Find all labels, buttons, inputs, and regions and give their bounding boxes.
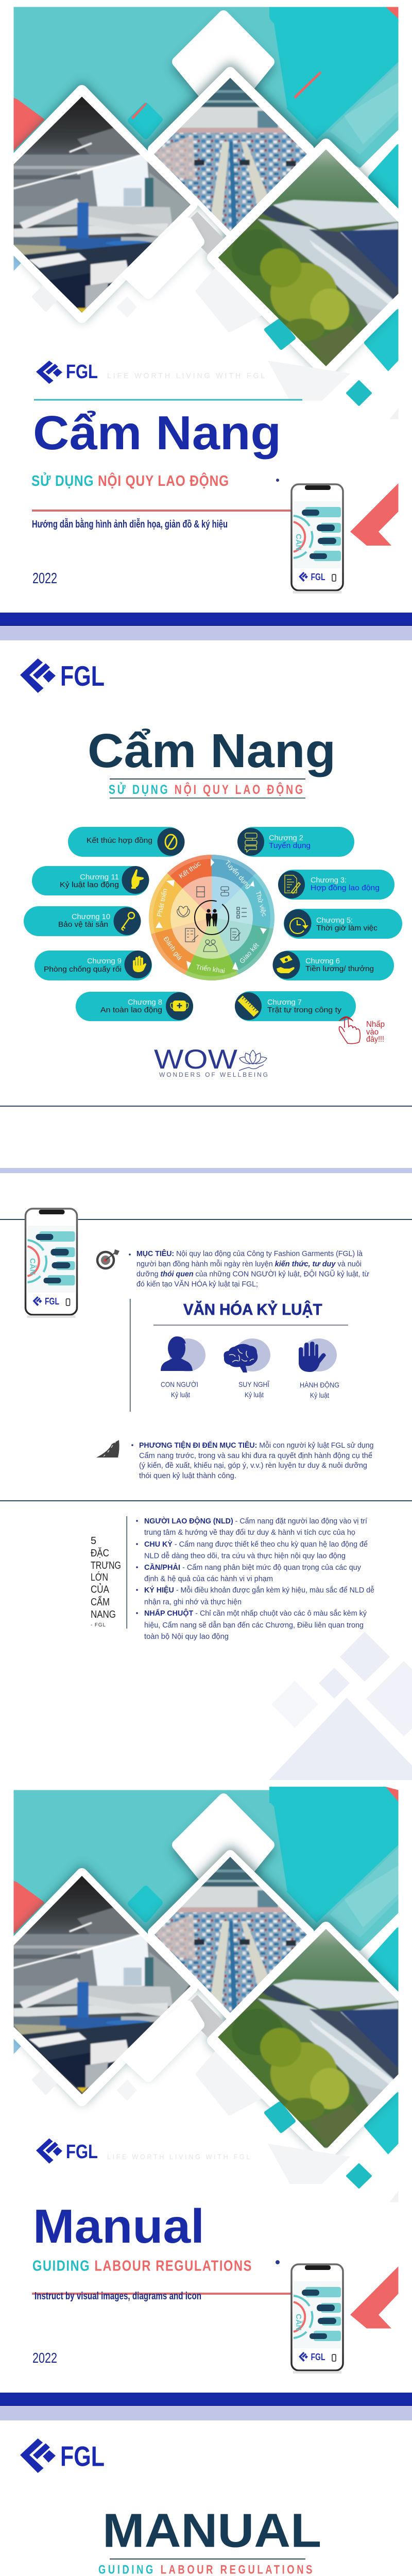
chapter 9 [35,951,152,980]
year: 2022 [32,570,57,587]
cycle wheel: Kết thúc [178,859,202,880]
objective text: MỤC TIÊU: Nội quy lao động của Công ty Fashion Garments (FGL) là [136,1249,363,1258]
section heading: 5 features: TRƯNG [91,1560,121,1571]
logo: FGL: FGL [60,660,105,692]
phone mockup: CẦN [28,1258,37,1275]
means to goal text: thói quen kỷ luật thành công. [139,1472,236,1480]
chapter 9: Chương 9 [87,957,122,965]
arrow chevron [350,483,399,546]
phone mockup [291,484,343,594]
chapter 11 [32,866,149,895]
chapter 3: Chương 3: [311,876,347,885]
year: 2022 [32,2350,57,2366]
feature list: nhận ra, ghi nhớ và thực hiện [144,1598,242,1606]
section heading: 5 features: NANG [91,1609,116,1620]
click hint: vào [366,1028,379,1037]
photo: factory floor [152,76,309,233]
feature list [136,1516,374,1641]
WOW logo [154,1044,268,1078]
icon group: people thoughts actions: HÀNH ĐỘNG [300,1381,339,1389]
section heading: 5 features: 5 [91,1535,96,1547]
objective text: dưỡng thói quen của những CON NGƯỜI kỷ luật, ĐỘI NGŨ kỷ luật, từ [136,1269,369,1279]
chapter 2: Tuyển dụng [269,841,311,850]
icon: road [96,1440,119,1458]
tagline: Instruct by visual images, diagrams and icon [35,2291,201,2302]
icon group: people thoughts actions: Kỷ luật [245,1391,264,1399]
phone mockup: FGL [45,1296,59,1307]
section heading: 5 features: LỚN [91,1571,108,1583]
icon group: people thoughts actions [161,1336,339,1399]
chapter 11: Chương 11 [80,873,119,882]
arrow chevron [350,2266,399,2329]
chapter 8: An toàn lao động [100,1006,162,1014]
chapter 6: Tiền lương/ thưởng [305,964,374,973]
cover panel: Vietnamese photo collage [0,7,412,430]
chapter 3: Hợp đồng lao động [311,884,380,892]
subtitle with rules: SỬ DỤNG NỘI QUY LAO ĐỘNG [109,782,305,797]
icon group: people thoughts actions: Kỷ luật [310,1391,329,1399]
chapter 10: Chương 10 [72,912,110,921]
heading: discipline culture: VĂN HÓA KỶ LUẬT [183,1300,322,1318]
title: Manual: Manual [33,2199,204,2253]
logo: FGL: FGL [60,2440,105,2472]
icon group: people thoughts actions: SUY NGHĨ [238,1380,270,1388]
phone mockup [291,2264,343,2374]
icon: target [97,1249,119,1268]
chapter 2: Chương 2 [269,834,303,842]
section heading: 5 features: ĐẶC [91,1547,109,1559]
small diamond [347,381,371,405]
section heading: 5 features [91,1535,121,1628]
logo: FGL with tagline: FGL [66,361,98,383]
objective text [129,1249,369,1289]
cycle wheel: Triển khai [196,963,226,975]
cycle wheel: Đánh giá [162,935,184,962]
phone mockup: FGL [311,2352,325,2362]
chapter 10 [24,906,141,936]
cycle wheel: Tuyển dụng [224,859,253,890]
click hint [339,1017,385,1044]
decorative triangles [269,1632,412,1780]
means to goal text: (ý kiến, đề xuất, khiếu nại, góp ý, v.v.) rèn luyện tư duy & nuôi dưỡng [139,1462,367,1470]
feature list: toàn bộ Nội quy lao động [144,1633,229,1641]
title: Cẩm Nang centered: Cẩm Nang [88,724,336,777]
logo: FGL with tagline: LIFE WORTH LIVING WITH FGL [107,2153,252,2161]
logo: FGL [20,658,105,693]
click hint: Nhấp [366,1020,385,1029]
phone mockup: CẦN [294,2314,303,2331]
phone mockup: CẦN [294,534,303,550]
chapter 11: Kỷ luật lao động [60,880,119,889]
photo: printing machinery [10,93,196,319]
feature list: KÝ HIỆU - Mỗi điều khoản được gắn kèm ký hiệu, màu sắc để NLD dễ [144,1585,374,1595]
feature list: NGƯỜI LAO ĐỘNG (NLD) - Cẩm nang đặt người lao động vào vị trí [144,1516,367,1526]
chapter: termination [68,827,184,857]
chapter: termination: Kết thúc hợp đồng [87,836,152,845]
subtitle: SỬ DỤNG NỘI QUY LAO ĐỘNG [31,472,229,489]
icon group: people thoughts actions: Kỷ luật [171,1391,190,1399]
small diamond [347,2164,371,2188]
chapter 5: Thời giờ làm việc [316,924,377,933]
feature list: trung tâm & hướng về thay đổi tư duy & hành vi tích cực của họ [144,1529,355,1537]
chapter 3 [278,870,394,900]
means to goal text: PHƯƠNG TIỆN ĐI ĐẾN MỤC TIÊU: Mỗi con người kỷ luật FGL sử dụng [139,1440,374,1450]
logo: FGL with tagline: LIFE WORTH LIVING WITH FGL [107,371,267,380]
feature list: CẦN/PHẢI - Cẩm nang phân biệt mức độ quan trọng của các quy [144,1563,362,1572]
logo: FGL with tagline [36,2138,252,2164]
WOW logo: WONDERS OF WELLBEING [159,1071,268,1078]
photo: factory floor [152,1856,309,2013]
chapter 8: Chương 8 [128,998,162,1007]
logo: FGL [20,2438,105,2473]
chapter 9: Phòng chống quấy rối [44,965,122,974]
photo: factory building [216,1926,402,2148]
chapter 8 [76,992,193,1021]
cycle wheel: Giao kết [238,941,261,965]
cover panel: English photo collage [0,1787,412,2213]
feature list: CHU KỲ - Cẩm nang được thiết kế theo chu kỳ quan hệ lao động để [144,1539,368,1549]
logo: FGL with tagline [36,361,267,384]
feature list: NLD dễ dàng theo dõi, tra cứu và thực hiện nội quy lao động [144,1552,346,1560]
means to goal text [131,1440,373,1480]
chapter 2 [237,827,354,857]
chapter 10: Bảo vệ tài sản [58,920,108,929]
feature list: NHẤP CHUỘT - Chỉ cần một nhấp chuột vào các ô màu sắc kèm ký [144,1608,367,1618]
cycle wheel [149,855,274,980]
chapter 5 [284,909,402,939]
objective text: đó kiến tạo VĂN HÓA kỷ luật tại FGL; [136,1280,258,1289]
means to goal text: Cẩm nang trước, trong và sau khi đưa ra quyết định hành động cụ thể [139,1452,372,1460]
chapter 7: Trật tự trong công ty [267,1006,342,1014]
photo: factory building [216,147,402,368]
logo: FGL with tagline: FGL [66,2141,98,2163]
icon group: people thoughts actions: CON NGƯỜI [161,1380,198,1388]
subtitle: GUIDING LABOUR REGULATIONS [32,2258,252,2274]
title: MANUAL: MANUAL [102,2504,321,2557]
section heading: 5 features: CỦA [91,1583,110,1595]
feature list: hiệu, Cẩm nang sẽ dẫn bạn đến các Chương, Điều liên quan trong [144,1621,364,1630]
title: Cẩm Nang: Cẩm Nang [33,406,281,460]
phone mockup: FGL [311,572,325,582]
tagline: Hướng dẫn bằng hình ảnh diễn họa, giản đồ & ký hiệu [32,518,228,530]
objective text: người bạn đồng hành mỗi ngày rèn luyện kiến thức, tư duy và nuôi [136,1260,362,1268]
section heading: 5 features: - FGL [91,1622,106,1628]
click hint: đây!!! [366,1035,384,1044]
chapter 6: Chương 6 [305,957,340,965]
chapter 6 [273,951,394,980]
feature list: định & hệ quả của các hành vi vi phạm [144,1575,273,1583]
chapter 7: Chương 7 [267,998,302,1007]
chapter 5: Chương 5: [316,916,353,925]
phone mockup [25,1207,78,1318]
photo: printing machinery [10,1872,196,2099]
chapter 7 [235,991,356,1021]
cycle wheel: Phát triển [155,888,169,918]
section heading: 5 features: CẨM [91,1596,110,1608]
cycle wheel: Thử việc [254,890,268,918]
WOW logo: WOW [154,1044,237,1075]
